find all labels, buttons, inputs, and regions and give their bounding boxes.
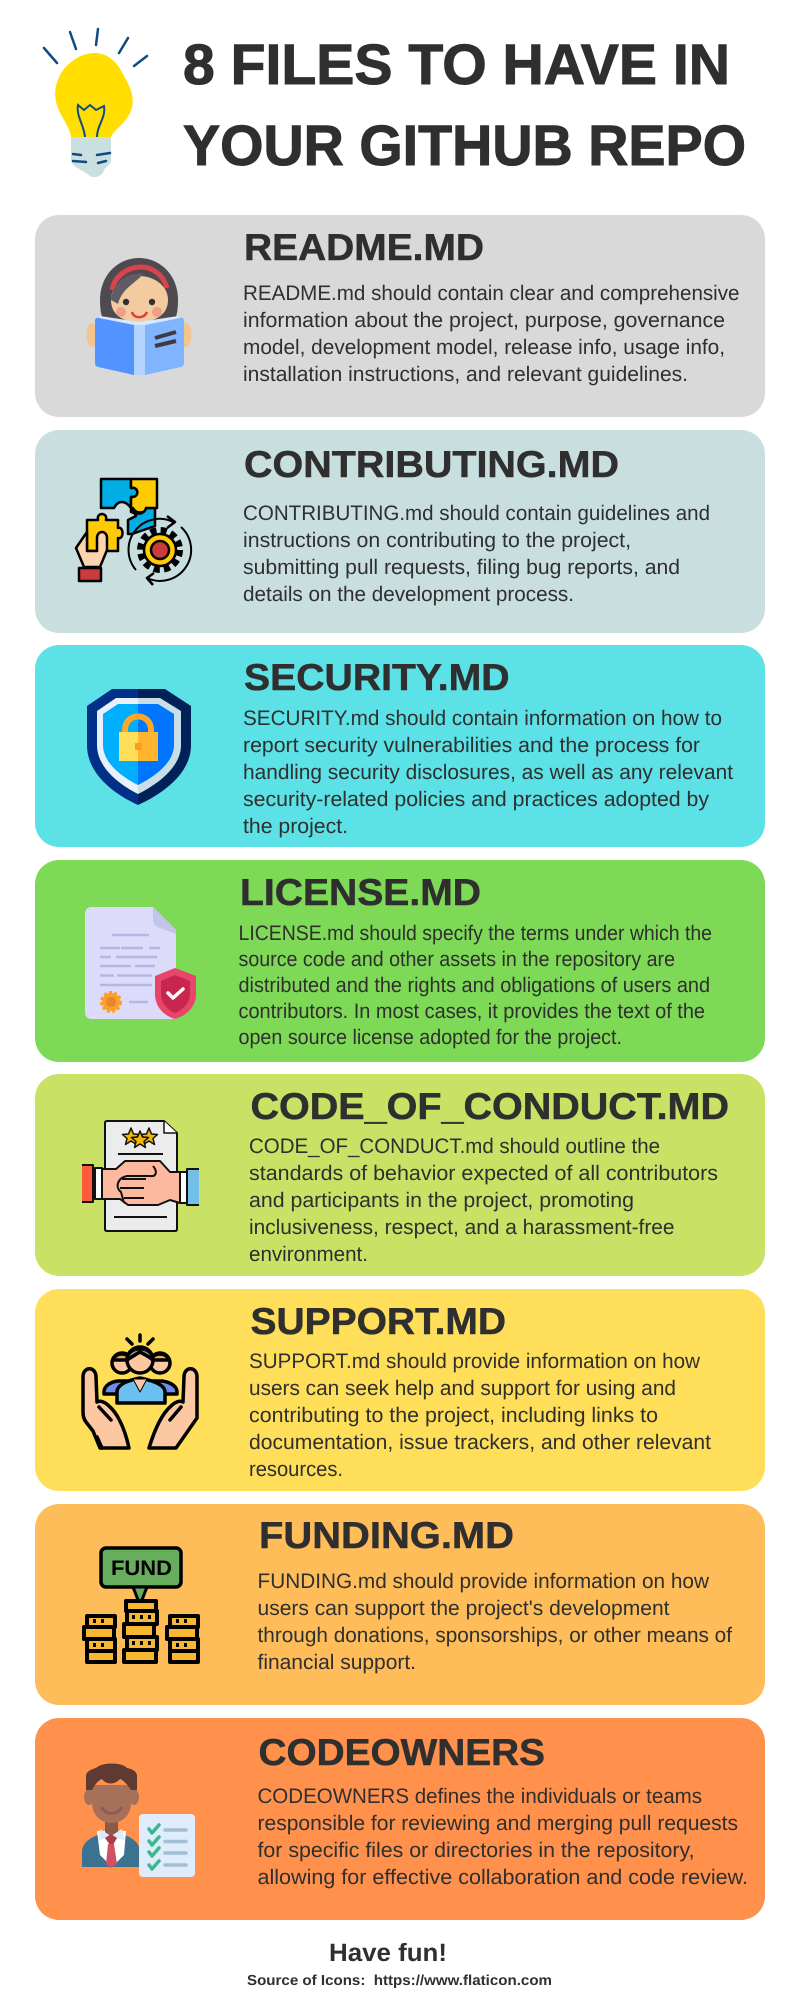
panel: SECURITY.MD <box>35 645 765 847</box>
description: submitting pull requests, filing bug reports, and <box>243 556 680 579</box>
title: YOUR GITHUB REPO <box>183 114 746 178</box>
description: standards of behavior expected of all contributors <box>249 1162 718 1185</box>
description: SUPPORT.md should provide information on how <box>249 1350 701 1373</box>
description <box>258 1785 748 1889</box>
description: installation instructions, and relevant guidelines. <box>243 363 688 386</box>
description: resources. <box>249 1458 343 1481</box>
title <box>183 33 746 178</box>
description: and participants in the project, promoting <box>249 1189 634 1212</box>
heading: SECURITY.MD <box>244 656 510 698</box>
heading: FUNDING.MD <box>259 1514 514 1556</box>
description: CODE_OF_CONDUCT.md should outline the <box>249 1135 660 1158</box>
description: responsible for reviewing and merging pull requests <box>258 1812 738 1835</box>
heading: SUPPORT.MD <box>250 1300 506 1342</box>
description: LICENSE.md should specify the terms under which the <box>238 922 712 945</box>
description: through donations, sponsorships, or other means of <box>258 1624 732 1647</box>
description: environment. <box>249 1243 368 1266</box>
icon: puzzle and gear <box>76 479 191 585</box>
icon: hands holding people <box>83 1335 197 1448</box>
icon: shield with lock <box>87 689 191 805</box>
description: FUNDING.md should provide information on how <box>258 1570 710 1593</box>
description: contributors. In most cases, it provides the text of the <box>238 1000 705 1023</box>
description: allowing for effective collaboration and code review. <box>258 1866 748 1889</box>
description: information about the project, purpose, governance <box>243 309 725 332</box>
icon: handshake over document <box>82 1121 199 1231</box>
icon: certificate document with shield <box>85 907 196 1019</box>
description: financial support. <box>258 1651 416 1674</box>
description: details on the development process. <box>243 583 574 606</box>
description: CONTRIBUTING.md should contain guidelines and <box>243 502 710 525</box>
panel: SUPPORT.MD <box>35 1289 765 1491</box>
description: CODEOWNERS defines the individuals or teams <box>258 1785 702 1808</box>
description: inclusiveness, respect, and a harassment-free <box>249 1216 674 1239</box>
description: instructions on contributing to the project, <box>243 529 631 552</box>
description: open source license adopted for the project. <box>238 1026 622 1049</box>
description: users can support the project's development <box>258 1597 670 1620</box>
description: SECURITY.md should contain information on how to <box>243 707 722 730</box>
description: report security vulnerabilities and the process for <box>243 734 700 757</box>
closing line: Have fun! <box>329 1939 447 1967</box>
description: the project. <box>243 815 348 838</box>
icon: light bulb <box>44 29 147 177</box>
description: README.md should contain clear and comprehensive <box>243 282 740 305</box>
heading: CONTRIBUTING.MD <box>244 443 619 485</box>
panel: CONTRIBUTING.MD <box>35 430 765 633</box>
icon: fund sign and coin stacks: FUND <box>111 1557 172 1580</box>
description <box>243 282 740 386</box>
heading: LICENSE.MD <box>240 871 481 913</box>
source credit: Source of Icons: https://www.flaticon.com <box>247 1973 552 1989</box>
description: model, development model, release info, usage info, <box>243 336 725 359</box>
description: contributing to the project, including links to <box>249 1404 658 1427</box>
panel: FUNDING.MD <box>35 1504 765 1705</box>
icon: fund sign and coin stacks <box>84 1548 198 1662</box>
icon: person with checklist <box>82 1764 195 1877</box>
description <box>243 707 733 838</box>
description <box>249 1135 718 1266</box>
description <box>238 922 712 1049</box>
panel: README.MD <box>35 215 765 417</box>
description <box>243 502 710 606</box>
title: 8 FILES TO HAVE IN <box>183 33 730 97</box>
panel: CODE_OF_CONDUCT.MD <box>35 1074 765 1276</box>
description: distributed and the rights and obligations of users and <box>238 974 710 997</box>
heading: README.MD <box>244 226 484 268</box>
description: handling security disclosures, as well as any relevant <box>243 761 733 784</box>
heading: CODE_OF_CONDUCT.MD <box>250 1085 729 1127</box>
description <box>249 1350 711 1481</box>
panel: CODEOWNERS <box>35 1718 765 1920</box>
icon: girl reading book <box>86 258 192 375</box>
description: users can seek help and support for using and <box>249 1377 676 1400</box>
description: source code and other assets in the repository are <box>238 948 675 971</box>
description: documentation, issue trackers, and other relevant <box>249 1431 711 1454</box>
description: security-related policies and practices adopted by <box>243 788 710 811</box>
description <box>258 1570 732 1674</box>
heading: CODEOWNERS <box>258 1731 545 1773</box>
description: for specific files or directories in the repository, <box>258 1839 694 1862</box>
panel: LICENSE.MD <box>35 860 765 1062</box>
